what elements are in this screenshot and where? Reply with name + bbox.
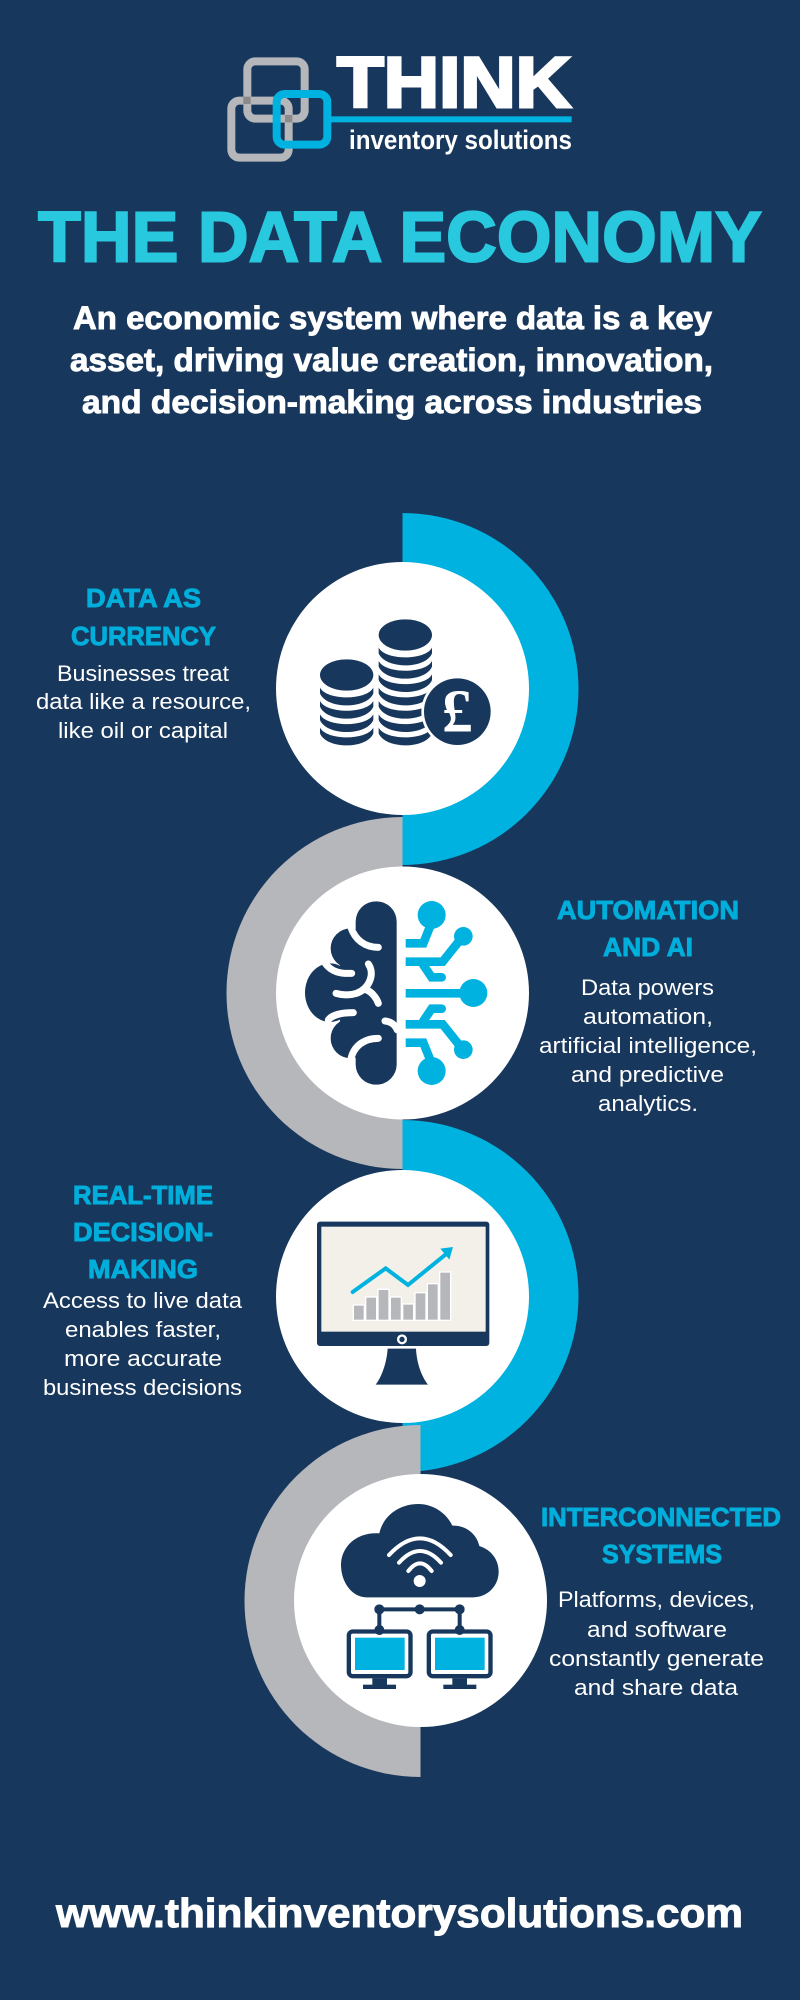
text: interconnected systems description: Platforms, devices, bbox=[558, 1587, 755, 1612]
heading: automation and AI: AUTOMATION bbox=[557, 895, 739, 925]
heading: interconnected systems: SYSTEMS bbox=[602, 1539, 722, 1569]
footer url: www.thinkinventorysolutions.com bbox=[55, 1890, 743, 1936]
white circle bbox=[294, 1474, 547, 1727]
text: real-time description bbox=[43, 1288, 243, 1400]
heading: real-time decision-making: MAKING bbox=[88, 1254, 198, 1284]
logo: Think Inventory Solutions bbox=[231, 44, 572, 158]
text: real-time description: Access to live data bbox=[43, 1288, 243, 1313]
text: data as currency description: data like a resource, bbox=[36, 689, 251, 714]
text: automation and AI description: Data powers bbox=[581, 975, 714, 1000]
heading: data as currency bbox=[71, 583, 216, 651]
heading: automation and AI: AND AI bbox=[603, 932, 693, 962]
subtitle bbox=[70, 300, 713, 420]
blue half ring bbox=[402, 513, 578, 865]
heading: data as currency: DATA AS bbox=[86, 583, 201, 613]
panel: real-time decision-making bbox=[43, 1120, 578, 1472]
heading: real-time decision-making: REAL-TIME bbox=[73, 1180, 213, 1210]
text: real-time description: more accurate bbox=[64, 1346, 222, 1371]
white circle bbox=[276, 562, 529, 815]
heading: real-time decision-making: DECISION- bbox=[73, 1217, 213, 1247]
blue half ring bbox=[402, 1120, 578, 1472]
text: automation and AI description: and predictive bbox=[571, 1062, 724, 1087]
icon: monitor with chart bbox=[317, 1222, 489, 1385]
subtitle: and decision-making across industries bbox=[82, 384, 702, 420]
text: data as currency description: like oil or capital bbox=[58, 718, 228, 743]
heading: automation and AI bbox=[557, 895, 739, 962]
heading: real-time decision-making bbox=[73, 1180, 213, 1284]
logo: Think Inventory Solutions: inventory solutions bbox=[349, 125, 572, 155]
grey half ring bbox=[227, 817, 402, 1169]
heading: interconnected systems bbox=[541, 1502, 781, 1569]
icon: coin stacks with pound: £ bbox=[442, 678, 473, 746]
text: data as currency description bbox=[36, 661, 251, 743]
subtitle: An economic system where data is a key bbox=[73, 300, 712, 336]
white circle bbox=[276, 1170, 529, 1423]
grey half ring bbox=[244, 1425, 420, 1777]
title: THE DATA ECONOMY bbox=[38, 198, 762, 278]
icon: brain and circuit bbox=[305, 901, 487, 1085]
text: interconnected systems description: and share data bbox=[574, 1675, 739, 1700]
panel: data as currency bbox=[36, 513, 578, 865]
text: interconnected systems description: constantly generate bbox=[549, 1646, 764, 1671]
text: real-time description: enables faster, bbox=[65, 1317, 221, 1342]
heading: data as currency: CURRENCY bbox=[71, 621, 216, 651]
text: automation and AI description: analytics. bbox=[598, 1091, 698, 1116]
subtitle: asset, driving value creation, innovation, bbox=[70, 342, 713, 378]
text: real-time description: business decisions bbox=[43, 1375, 242, 1400]
icon: coin stacks with pound bbox=[320, 619, 493, 748]
logo: Think Inventory Solutions: THINK bbox=[337, 44, 571, 123]
text: automation and AI description: automation, bbox=[583, 1004, 713, 1029]
heading: interconnected systems: INTERCONNECTED bbox=[541, 1502, 781, 1532]
icon: cloud network bbox=[341, 1504, 499, 1689]
text: automation and AI description bbox=[539, 975, 757, 1116]
text: data as currency description: Businesses treat bbox=[57, 661, 229, 686]
text: interconnected systems description: and software bbox=[587, 1617, 727, 1642]
panel: automation and AI bbox=[227, 817, 757, 1169]
white circle bbox=[276, 866, 529, 1120]
panel: interconnected systems bbox=[244, 1425, 781, 1777]
text: interconnected systems description bbox=[549, 1587, 764, 1700]
text: automation and AI description: artificial intelligence, bbox=[539, 1033, 757, 1058]
